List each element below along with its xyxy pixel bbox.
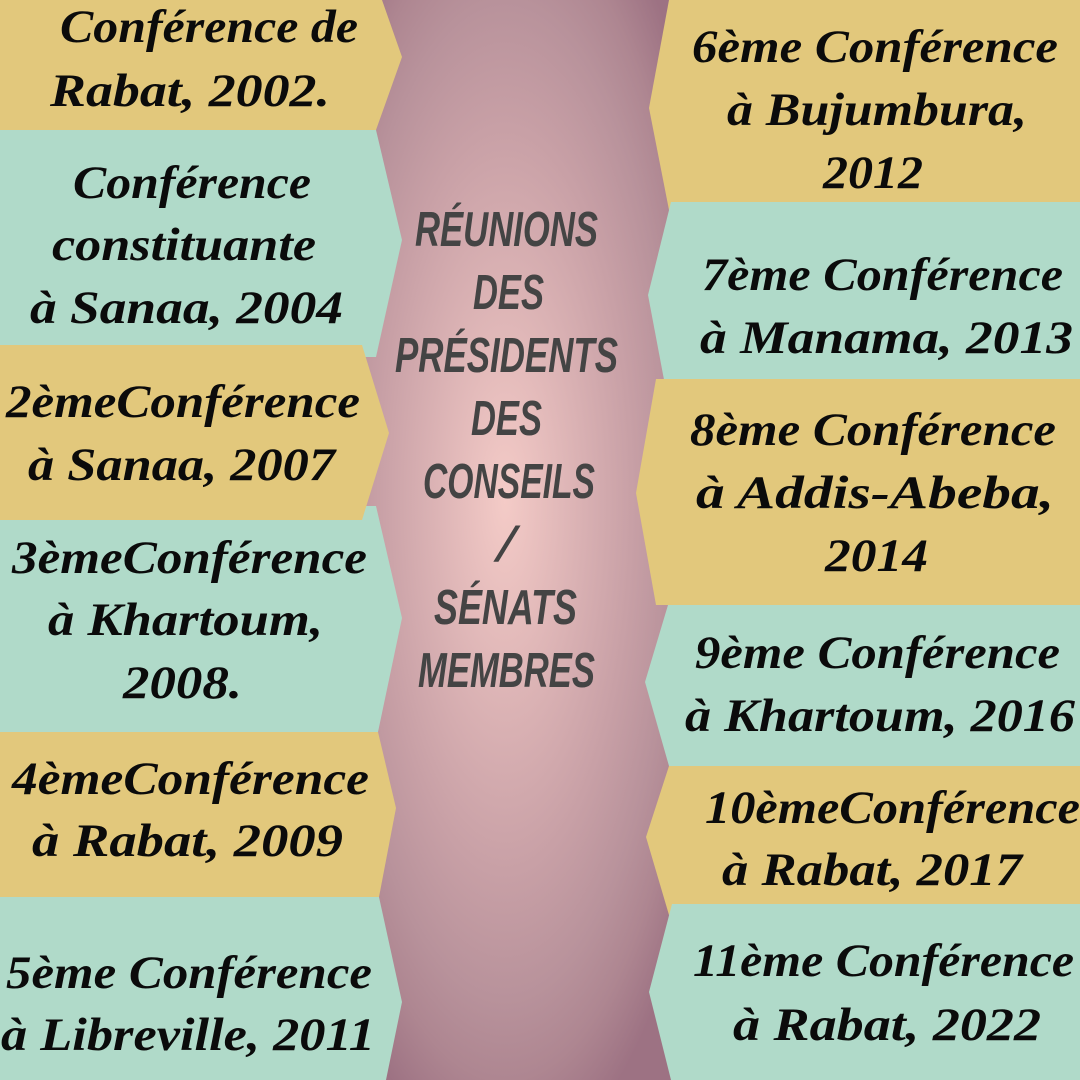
panel: 8ème Conférence à Addis-Abeba 2014: à Addis-Abeba, bbox=[696, 467, 1054, 519]
panel: 2ème Conférence à Sanaa 2007 bbox=[0, 345, 389, 520]
panel: 4ème Conférence à Rabat 2009 bbox=[0, 732, 396, 897]
panel: 5ème Conférence à Libreville 2011 bbox=[0, 897, 402, 1080]
central title: DES bbox=[473, 266, 544, 320]
panel: 7ème Conférence à Manama 2013: à Manama, 2013 bbox=[700, 312, 1073, 364]
central title: / bbox=[493, 518, 521, 572]
panel: 5ème Conférence à Libreville 2011: 5ème Conférence bbox=[6, 947, 372, 999]
panel: 11ème Conférence à Rabat 2022: à Rabat, 2022 bbox=[733, 999, 1041, 1051]
panel: Conférence de Rabat 2002 bbox=[0, 0, 402, 130]
panel: 2ème Conférence à Sanaa 2007: 2èmeConférence bbox=[5, 376, 360, 428]
panel: 10ème Conférence à Rabat 2017 bbox=[646, 766, 1080, 915]
central title: PRÉSIDENTS bbox=[395, 329, 618, 383]
panel: Conférence constituante à Sanaa 2004: constituante bbox=[52, 219, 316, 271]
panel: 4ème Conférence à Rabat 2009: à Rabat, 2009 bbox=[32, 815, 343, 867]
panel: 10ème Conférence à Rabat 2017: à Rabat, 2017 bbox=[722, 844, 1025, 896]
central title bbox=[395, 203, 618, 698]
panel: Conférence de Rabat 2002: Rabat, 2002. bbox=[49, 65, 330, 117]
panel: 8ème Conférence à Addis-Abeba 2014: 8ème Conférence bbox=[690, 404, 1056, 456]
central title: DES bbox=[471, 392, 542, 446]
panel: Conférence constituante à Sanaa 2004 bbox=[0, 130, 402, 357]
panel: 3ème Conférence à Khartoum 2008 bbox=[0, 506, 402, 732]
central title: MEMBRES bbox=[418, 644, 595, 698]
panel: 8ème Conférence à Addis-Abeba 2014 bbox=[636, 379, 1080, 605]
panel: 3ème Conférence à Khartoum 2008: 2008. bbox=[122, 657, 242, 709]
panel: 6ème Conférence à Bujumbura 2012 bbox=[649, 0, 1080, 210]
panel: 10ème Conférence à Rabat 2017: 10èmeConférence bbox=[705, 782, 1080, 834]
panel: 2ème Conférence à Sanaa 2007: à Sanaa, 2007 bbox=[28, 439, 338, 491]
panel: 9ème Conférence à Khartoum 2016: 9ème Conférence bbox=[695, 627, 1060, 679]
panel: 11ème Conférence à Rabat 2022: 11ème Conférence bbox=[693, 935, 1074, 987]
panel: 3ème Conférence à Khartoum 2008: 3èmeConférence bbox=[11, 532, 367, 584]
panel: Conférence constituante à Sanaa 2004: Conférence bbox=[73, 157, 311, 209]
panel: 7ème Conférence à Manama 2013 bbox=[648, 202, 1080, 385]
panel: 7ème Conférence à Manama 2013: 7ème Conférence bbox=[702, 249, 1063, 301]
panel: 9ème Conférence à Khartoum 2016: à Khartoum, 2016 bbox=[685, 690, 1076, 742]
central title: SÉNATS bbox=[434, 581, 577, 635]
panel: 5ème Conférence à Libreville 2011: à Libreville, 2011 bbox=[1, 1009, 375, 1061]
panel: 6ème Conférence à Bujumbura 2012: 2012 bbox=[822, 147, 923, 199]
panel: 6ème Conférence à Bujumbura 2012: 6ème Conférence bbox=[692, 21, 1058, 73]
panel: Conférence constituante à Sanaa 2004: à Sanaa, 2004 bbox=[30, 282, 343, 334]
panel: Conférence de Rabat 2002: Conférence de bbox=[60, 1, 358, 53]
panel: 3ème Conférence à Khartoum 2008: à Khartoum, bbox=[48, 594, 323, 646]
panel: 8ème Conférence à Addis-Abeba 2014: 2014 bbox=[824, 530, 928, 582]
panel: 9ème Conférence à Khartoum 2016 bbox=[645, 605, 1080, 766]
central title: CONSEILS bbox=[423, 455, 595, 509]
panel: 4ème Conférence à Rabat 2009: 4èmeConférence bbox=[11, 753, 369, 805]
panel: 11ème Conférence à Rabat 2022 bbox=[649, 904, 1080, 1080]
panel: 6ème Conférence à Bujumbura 2012: à Bujumbura, bbox=[727, 84, 1027, 136]
central title: RÉUNIONS bbox=[415, 203, 598, 257]
